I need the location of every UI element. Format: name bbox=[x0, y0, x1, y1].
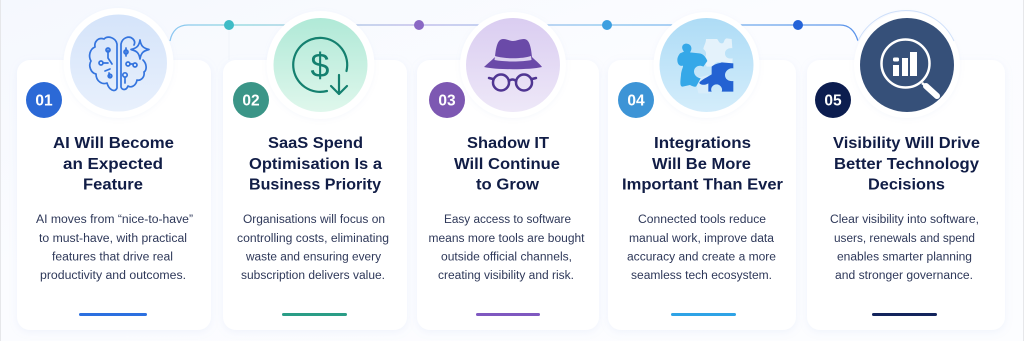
accent bar bbox=[671, 313, 736, 316]
heading: Will Be More bbox=[652, 156, 751, 173]
body text bbox=[36, 214, 193, 282]
heading: Shadow IT bbox=[467, 135, 550, 152]
badge 05 bbox=[815, 82, 851, 118]
accent bar bbox=[282, 313, 347, 316]
body text: waste and ensuring every bbox=[245, 252, 381, 264]
heading: Better Technology bbox=[834, 156, 979, 173]
heading: Business Priority bbox=[249, 176, 381, 194]
body text: controlling costs, eliminating bbox=[237, 233, 389, 245]
heading: Optimisation Is a bbox=[249, 156, 382, 173]
icon: dollar with down arrow bbox=[266, 11, 374, 119]
heading: Important Than Ever bbox=[622, 176, 783, 194]
heading bbox=[454, 135, 560, 194]
body text bbox=[237, 214, 389, 282]
icon: brain with sparkle bbox=[64, 8, 174, 118]
heading bbox=[833, 135, 980, 194]
accent bar bbox=[476, 313, 540, 316]
body text: and stronger governance. bbox=[835, 270, 973, 282]
heading: to Grow bbox=[476, 176, 540, 194]
badge 03: 03 bbox=[438, 92, 456, 110]
body text: accuracy and create a more bbox=[627, 252, 776, 264]
body text: means more tools are bought bbox=[428, 233, 585, 245]
accent bar bbox=[79, 313, 147, 316]
badge 01: 01 bbox=[35, 92, 53, 110]
heading: SaaS Spend bbox=[268, 135, 363, 152]
icon: magnifier with bars bbox=[854, 10, 960, 118]
body text: to must-have, with practical bbox=[39, 233, 187, 245]
badge 01 bbox=[26, 82, 62, 118]
badge 05: 05 bbox=[824, 92, 842, 110]
badge 02: 02 bbox=[242, 92, 260, 110]
heading bbox=[249, 135, 382, 194]
heading: an Expected bbox=[63, 156, 163, 173]
heading: Visibility Will Drive bbox=[833, 135, 980, 152]
heading bbox=[622, 135, 783, 194]
body text bbox=[428, 214, 585, 282]
body text bbox=[627, 214, 776, 282]
accent bar bbox=[872, 313, 937, 316]
body text: Connected tools reduce bbox=[638, 214, 766, 226]
heading: Decisions bbox=[868, 176, 945, 194]
body text: AI moves from “nice-to-have” bbox=[36, 214, 193, 226]
heading: Will Continue bbox=[454, 156, 560, 173]
badge 02 bbox=[233, 82, 269, 118]
panel: 05 Visibility bbox=[807, 10, 1005, 330]
body text: creating visibility and risk. bbox=[438, 270, 574, 282]
badge 04 bbox=[618, 82, 654, 118]
body text: outside official channels, bbox=[441, 252, 572, 264]
panel: 02 SaaS spend bbox=[223, 11, 407, 330]
body text: Clear visibility into software, bbox=[830, 214, 979, 226]
body text: subscription delivers value. bbox=[241, 270, 385, 282]
connector timeline with dots bbox=[170, 20, 858, 60]
body text: Organisations will focus on bbox=[243, 214, 385, 226]
panel: 03 Shadow IT bbox=[417, 12, 599, 330]
heading: Feature bbox=[83, 176, 143, 194]
body text: users, renewals and spend bbox=[834, 233, 975, 245]
icon: dollar with down arrow: $ bbox=[311, 47, 330, 85]
icon: puzzle pieces bbox=[654, 12, 760, 118]
body text: enables smarter planning bbox=[837, 252, 972, 264]
icon: hat and glasses bbox=[460, 12, 566, 118]
heading bbox=[53, 135, 174, 194]
heading: AI Will Become bbox=[53, 135, 174, 152]
body text: manual work, improve data bbox=[629, 233, 775, 245]
badge 03 bbox=[429, 82, 465, 118]
body text: Easy access to software bbox=[444, 214, 571, 226]
body text: features that drive real bbox=[52, 252, 173, 264]
badge 04: 04 bbox=[627, 92, 645, 110]
panel: 04 Integrations bbox=[608, 12, 796, 330]
heading: Integrations bbox=[654, 135, 751, 152]
body text: productivity and outcomes. bbox=[40, 270, 186, 282]
body text bbox=[830, 214, 979, 282]
panel: 01 AI bbox=[17, 8, 211, 330]
body text: seamless tech ecosystem. bbox=[631, 270, 772, 282]
